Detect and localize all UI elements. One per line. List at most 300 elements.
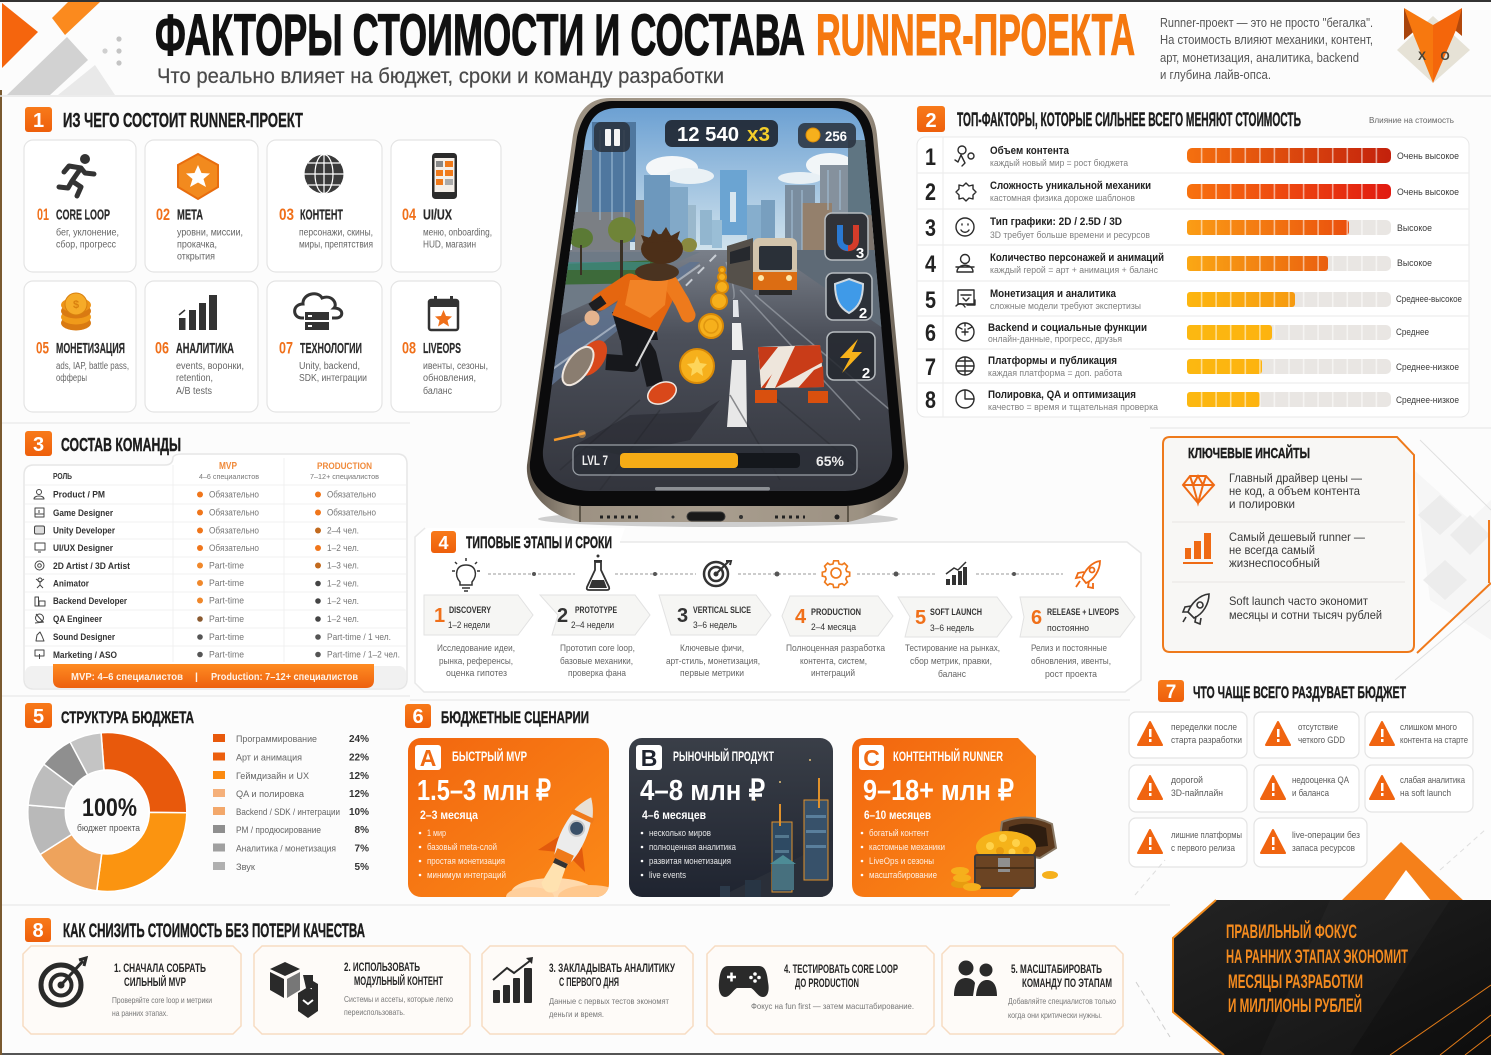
- card: technology: 07: [279, 338, 293, 358]
- hud: coins: 256: [825, 128, 847, 144]
- card: ui ux: 04: [402, 205, 416, 224]
- factor 4: каждый герой = арт + анимация + баланс: [990, 265, 1159, 275]
- card: content: КОНТЕНТ: [300, 208, 343, 224]
- tip 1: [23, 946, 241, 1034]
- card: live ops without reserve: live-операции без: [1292, 830, 1360, 840]
- factor 1: Объем контента: [990, 145, 1070, 157]
- power-up: shield: [826, 273, 872, 322]
- icon: rocket orange: [1076, 561, 1100, 588]
- card: liveops: 08: [402, 338, 416, 358]
- card: technology: ТЕХНОЛОГИИ: [300, 341, 362, 357]
- factor 8: качество = время и тщательная проверка: [988, 402, 1158, 412]
- card: monetization: офферы: [56, 372, 87, 384]
- factor 4: [925, 251, 1432, 278]
- row: product: [34, 490, 376, 500]
- icon: globe: [304, 154, 344, 194]
- factor 7: каждая платформа = доп. работа: [988, 368, 1122, 378]
- badge 5: [25, 703, 52, 728]
- factor 3: [925, 215, 1432, 242]
- scenario A: простая монетизация: [427, 856, 505, 867]
- card: meta: уровни, миссии,: [177, 228, 243, 238]
- stage: discovery: Исследование идеи,: [437, 643, 515, 653]
- stage: soft launch: [898, 597, 1012, 679]
- donut center label: [77, 794, 141, 834]
- card: content: 03: [279, 205, 294, 224]
- card: content: [267, 140, 382, 272]
- card: rework: переделки после: [1171, 722, 1237, 732]
- stage: vertical slice: [659, 595, 771, 678]
- intro text: и глубина лайв-опса.: [1160, 68, 1271, 82]
- card: rework: старта разработки: [1171, 735, 1242, 745]
- factor 5: Среднее-высокое: [1396, 294, 1462, 305]
- budget legend: 24%: [349, 734, 369, 745]
- stage: production: 4: [795, 606, 807, 628]
- scenario C: богатый контент: [869, 828, 929, 839]
- row: animator: [36, 578, 359, 588]
- stage: vertical slice: первые метрики: [680, 668, 744, 678]
- factor 6: [925, 320, 1429, 347]
- factor 1: 1: [925, 144, 936, 171]
- card: analytics: events, воронки,: [176, 361, 244, 372]
- budget legend: 7%: [355, 844, 369, 854]
- stage: vertical slice: Ключевые фичи,: [680, 643, 744, 653]
- factor 3: 3: [925, 215, 936, 242]
- card: technology: [267, 281, 382, 412]
- factor table: [917, 137, 1469, 417]
- card: ui ux: меню, onboarding,: [423, 228, 492, 238]
- factor 7: Среднее-низкое: [1396, 362, 1459, 373]
- row: unity developer: [34, 526, 359, 536]
- row: unity developer: 2–4 чел.: [327, 526, 359, 536]
- stage: release and liveops: обновления, ивенты,: [1031, 656, 1111, 666]
- stage: discovery: 1–2 недели: [448, 620, 490, 630]
- tip 2: Системы и ассеты, которые легко: [344, 994, 453, 1004]
- stage: vertical slice: VERTICAL SLICE: [693, 605, 751, 616]
- panel: 1 what a runner project consists of: [24, 107, 501, 412]
- budget legend: Аналитика / монетизация: [236, 844, 336, 854]
- tip 5: когда они критически нужны.: [1008, 1010, 1102, 1020]
- stage: vertical slice: 3–6 недель: [693, 620, 737, 630]
- callout banner: МЕСЯЦЫ РАЗРАБОТКИ: [1228, 972, 1363, 993]
- heading 6: БЮДЖЕТНЫЕ СЦЕНАРИИ: [441, 709, 589, 727]
- icon: target: [704, 561, 731, 586]
- icon: diamond: [1183, 476, 1214, 503]
- card: expensive 3d: [1129, 765, 1247, 812]
- scenario A: базовый meta-слой: [427, 842, 497, 853]
- row: qa: [35, 614, 359, 624]
- factor 1: [925, 144, 1459, 171]
- stage: soft launch: SOFT LAUNCH: [930, 607, 982, 618]
- card: meta: [145, 140, 258, 272]
- stage: prototype: проверка фана: [568, 668, 627, 678]
- callout banner: ПРАВИЛЬНЫЙ ФОКУС: [1226, 921, 1357, 943]
- coins on track: [680, 267, 728, 383]
- factor 7: [925, 354, 1459, 381]
- row: ui ux designer: UI/UX Designer: [53, 543, 113, 553]
- scenario B: 4–8 млн ₽: [640, 775, 765, 807]
- heading 5: СТРУКТУРА БЮДЖЕТА: [61, 709, 194, 727]
- badge 7: 7: [1166, 682, 1176, 703]
- icon: hexagon star: [178, 154, 218, 199]
- team summary bar: |: [195, 671, 198, 683]
- stage: vertical slice: арт-стиль, монетизация,: [666, 656, 760, 666]
- hud: score: x3: [747, 124, 770, 146]
- stage: discovery: DISCOVERY: [449, 605, 491, 616]
- icon: coin stack: $: [73, 299, 79, 311]
- stage: discovery: оценка гипотез: [446, 668, 507, 678]
- factor 5: 5: [925, 287, 936, 314]
- row: marketing: Part-time: [209, 650, 244, 660]
- insight: content drives cost: Главный драйвер цены —: [1229, 472, 1362, 485]
- scenario C: [852, 738, 1058, 897]
- row: unity developer: Unity Developer: [53, 526, 115, 536]
- scenario C: масштабирование: [869, 870, 937, 881]
- team summary bar: MVP: 4–6 специалистов: [71, 671, 183, 683]
- card: meta: МЕТА: [177, 208, 203, 224]
- card: extra platforms: [1129, 818, 1247, 867]
- factor 3: 3D требует больше времени и ресурсов: [990, 230, 1150, 240]
- hud: level progress: 65%: [816, 453, 845, 469]
- row: sound: Part-time / 1 чел.: [327, 632, 391, 642]
- barrier: [755, 345, 828, 403]
- card: technology: Unity, backend,: [299, 361, 360, 372]
- row: unity developer: Обязательно: [209, 526, 259, 536]
- insight: cheapest not viable: [1183, 531, 1365, 570]
- heading 1: ИЗ ЧЕГО СОСТОИТ RUNNER-ПРОЕКТ: [63, 110, 303, 132]
- badge 6: [405, 704, 431, 728]
- hud: level progress: [573, 445, 857, 475]
- factor 2: [925, 179, 1459, 206]
- callout banner: И МИЛЛИОНЫ РУБЛЕЙ: [1228, 995, 1362, 1017]
- donut center label: бюджет проекта: [77, 823, 141, 834]
- card: monetization: 05: [36, 338, 49, 358]
- tip 3: 3. ЗАКЛАДЫВАТЬ АНАЛИТИКУ: [549, 963, 676, 975]
- game screen: [535, 105, 900, 495]
- card: weak analytics: слабая аналитика: [1400, 775, 1466, 785]
- scenario B: полноценная аналитика: [649, 842, 737, 853]
- card: core loop: [24, 140, 136, 272]
- icon: bulb: [452, 558, 480, 591]
- scenario C: КОНТЕНТНЫЙ RUNNER: [893, 747, 1003, 764]
- factor 6: 6: [925, 320, 936, 347]
- card: analytics: retention,: [176, 373, 213, 384]
- icon: fox logo: O: [1440, 49, 1450, 63]
- card: extra platforms: лишние платформы: [1171, 830, 1242, 840]
- row: ui ux designer: [35, 543, 359, 553]
- icon: fox logo: X: [1418, 49, 1426, 63]
- row: product: Product / PM: [53, 490, 105, 500]
- power-up: lightning: [827, 332, 875, 382]
- stage: soft launch: Тестирование на рынках,: [905, 643, 1000, 653]
- budget legend: 12%: [349, 789, 369, 800]
- badge 3: [25, 431, 52, 456]
- stage: production: 2–4 месяца: [811, 622, 856, 632]
- budget legend: Программирование: [236, 734, 317, 745]
- decor: orange triangle: [1135, 830, 1485, 1037]
- card: no gdd: [1254, 712, 1359, 758]
- stage: discovery: [424, 595, 533, 678]
- card: core loop: сбор, прогресс: [56, 238, 116, 250]
- budget legend: 12%: [349, 771, 369, 782]
- icon: cloud server: [295, 294, 342, 330]
- panel: 7 budget inflators: [1129, 680, 1473, 867]
- card: core loop: 01: [37, 205, 49, 224]
- factor 8: [925, 387, 1459, 414]
- tip 5: КОМАНДУ ПО ЭТАПАМ: [1022, 978, 1112, 990]
- factor 2: кастомная физика дороже шаблонов: [990, 193, 1135, 203]
- hud: score: 12 540: [677, 124, 739, 146]
- tip 4: ДО PRODUCTION: [795, 978, 859, 990]
- scenario B: [629, 738, 833, 897]
- panel: 5 budget structure: [25, 703, 369, 891]
- stage: release and liveops: Релиз и постоянные: [1031, 643, 1107, 653]
- team table: 4–6 специалистов: [199, 472, 259, 481]
- stage: soft launch: сбор метрик, правки,: [910, 656, 992, 666]
- tip 4: Фокус на fun first — затем масштабирование.: [751, 1001, 914, 1011]
- card: analytics: A/B tests: [176, 386, 212, 397]
- tip 4: [707, 946, 934, 1034]
- card: technology: SDK, интеграции: [299, 373, 367, 384]
- intro text: Runner-проект — это не просто "бегалка".: [1160, 16, 1373, 30]
- badge 7: [1158, 680, 1184, 703]
- callout banner: [1173, 900, 1491, 1055]
- tip 3: Данные с первых тестов экономят: [549, 996, 669, 1006]
- hud: score: [665, 120, 778, 147]
- row: animator: Animator: [53, 578, 89, 588]
- tip 3: С ПЕРВОГО ДНЯ: [559, 977, 619, 989]
- tip 1: СИЛЬНЫЙ MVP: [124, 976, 186, 989]
- factor 1: Очень высокое: [1397, 151, 1459, 162]
- icon: gamepad: [719, 966, 769, 997]
- panel: 6 budget scenarios: [405, 704, 1058, 909]
- insight: content drives cost: [1183, 472, 1362, 511]
- icon: gear: [822, 561, 850, 587]
- budget legend: QA и полировка: [236, 789, 305, 800]
- stage: release and liveops: постоянно: [1047, 623, 1089, 633]
- scenario C: C: [863, 745, 880, 771]
- card: analytics: [145, 281, 258, 412]
- row: ui ux designer: 1–2 чел.: [327, 543, 359, 553]
- row: game designer: Обязательно: [209, 508, 259, 518]
- factor 4: Количество персонажей и анимаций: [990, 252, 1164, 264]
- icon: runner: [59, 154, 94, 196]
- runner character: [556, 227, 688, 408]
- card: weak analytics: [1365, 765, 1473, 812]
- budget legend: 8%: [355, 825, 369, 836]
- title: ФАКТОРЫ СТОИМОСТИ И СОСТАВА: [155, 3, 805, 68]
- factor 8: Среднее-низкое: [1396, 395, 1459, 406]
- scenario A: 1.5–3 млн ₽: [417, 775, 551, 807]
- team table: [24, 454, 407, 689]
- row: qa: Part-time: [209, 614, 244, 624]
- card: meta: прокачка,: [177, 240, 217, 250]
- row: animator: 1–2 чел.: [327, 578, 359, 588]
- header decoration: [2, 2, 122, 95]
- tip 5: 5. МАСШТАБИРОВАТЬ: [1011, 964, 1102, 976]
- tip 5: Добавляйте специалистов только: [1008, 996, 1116, 1006]
- panel: 2 top cost factors: [917, 106, 1469, 417]
- factor 3: Тип графики: 2D / 2.5D / 3D: [990, 216, 1122, 228]
- tip 5: [942, 946, 1123, 1034]
- title: RUNNER-ПРОЕКТА: [816, 3, 1135, 68]
- card: live ops without reserve: запаса ресурсов: [1292, 843, 1355, 853]
- icon: rocket outline: [1183, 594, 1209, 624]
- icon: phone: [432, 153, 457, 199]
- badge 4: 4: [438, 533, 449, 553]
- panel: 8 how to reduce cost: [23, 918, 1123, 1034]
- factor 5: сложные модели требуют экспертизы: [990, 301, 1141, 311]
- heading 4: ТИПОВЫЕ ЭТАПЫ И СРОКИ: [466, 533, 612, 552]
- factor 4: 4: [925, 251, 937, 278]
- tip 3: [482, 946, 693, 1034]
- budget legend: Геймдизайн и UX: [236, 771, 310, 782]
- scenario C: кастомные механики: [869, 842, 945, 853]
- stage: release and liveops: 6: [1031, 607, 1042, 629]
- scenario B: live events: [649, 870, 686, 881]
- scenario B: развитая монетизация: [649, 856, 731, 867]
- card: qa underestimated: [1254, 765, 1359, 812]
- factor 6: онлайн-данные, прогресс, друзья: [988, 334, 1122, 344]
- row: backend: 1–2 чел.: [327, 596, 359, 606]
- card: liveops: [391, 281, 501, 412]
- card: extra platforms: с первого релиза: [1171, 843, 1236, 853]
- donut chart: [28, 732, 187, 891]
- card: expensive 3d: 3D-пайплайн: [1171, 788, 1223, 798]
- insight: cheapest not viable: Самый дешевый runner —: [1229, 531, 1365, 544]
- badge 2: 2: [925, 110, 937, 132]
- panel: key insights: [1163, 437, 1414, 652]
- row: artist: Part-time: [209, 560, 244, 570]
- card: monetization: [24, 281, 136, 412]
- stage: prototype: Прототип core loop,: [560, 643, 635, 653]
- card: meta: 02: [156, 205, 170, 224]
- row: game designer: Обязательно: [327, 508, 376, 518]
- tip 1: Проверяйте core loop и метрики: [112, 995, 212, 1005]
- icon: calendar star: [429, 296, 458, 330]
- tip 1: на ранних этапах.: [112, 1008, 168, 1018]
- insight: content drives cost: не код, а объем контента: [1229, 485, 1361, 498]
- budget legend: Арт и анимация: [236, 752, 302, 764]
- stage: soft launch: 5: [915, 607, 926, 629]
- insight: cheapest not viable: жизнеспособный: [1229, 557, 1320, 570]
- power-up: magnet: 3: [856, 245, 864, 262]
- insight: cheapest not viable: не всегда самый: [1229, 544, 1315, 557]
- tip 1: 1. СНАЧАЛА СОБРАТЬ: [114, 963, 206, 975]
- team table: PRODUCTION: [317, 461, 372, 472]
- factor 2: Сложность уникальной механики: [990, 180, 1151, 192]
- row: qa: 1–2 чел.: [327, 614, 359, 624]
- row: animator: Part-time: [209, 578, 244, 588]
- row: product: Обязательно: [209, 490, 259, 500]
- card: live ops without reserve: [1254, 818, 1367, 867]
- card: analytics: АНАЛИТИКА: [176, 341, 234, 357]
- panel: 3 team composition: [24, 431, 407, 689]
- hud: pause: [594, 122, 630, 152]
- icon: bars: [179, 295, 217, 330]
- stage: release and liveops: [1020, 597, 1135, 679]
- stage: prototype: [540, 595, 650, 678]
- scenario C: LiveOps и сезоны: [869, 856, 934, 867]
- insights heading: КЛЮЧЕВЫЕ ИНСАЙТЫ: [1188, 444, 1310, 462]
- donut center label: 100%: [82, 794, 137, 822]
- power-up: lightning: 2: [862, 365, 870, 382]
- icon: orange bars: [1183, 533, 1213, 564]
- stage: release and liveops: рост проекта: [1045, 669, 1098, 679]
- stage: production: Полноценная разработка: [786, 643, 886, 653]
- team summary bar: Production: 7–12+ специалистов: [211, 671, 358, 683]
- tip 2: переиспользовать.: [344, 1007, 405, 1017]
- card: liveops: обновления,: [423, 372, 476, 384]
- team summary bar: [53, 664, 374, 688]
- row: backend: Part-time: [209, 596, 244, 606]
- badge 4: [431, 531, 456, 553]
- icon: fox logo: [1397, 8, 1470, 83]
- badge 8: 8: [32, 920, 44, 942]
- card: liveops: LIVEOPS: [423, 341, 461, 357]
- factor 8: Полировка, QA и оптимизация: [988, 389, 1136, 401]
- budget legend: Backend / SDK / интеграции: [236, 807, 340, 818]
- card: too much content: контента на старте: [1400, 735, 1468, 745]
- insight: soft launch saves: Soft launch часто экономит: [1229, 595, 1369, 608]
- power-up: magnet: [825, 213, 868, 262]
- intro text: арт, монетизация, аналитика, backend: [1160, 51, 1359, 65]
- stage: production: PRODUCTION: [811, 607, 861, 618]
- row: marketing: [35, 650, 400, 660]
- factor 8: 8: [925, 387, 936, 414]
- icon: growth chart: [946, 562, 967, 585]
- factor 1: каждый новый мир = рост бюджета: [990, 158, 1128, 168]
- card: monetization: ads, IAP, battle pass,: [56, 361, 129, 372]
- badge 3: 3: [33, 434, 44, 456]
- row: qa: QA Engineer: [53, 614, 102, 624]
- card: meta: открытия: [177, 252, 215, 262]
- scenario B: B: [641, 745, 657, 771]
- stage: production: контента, систем,: [800, 656, 867, 666]
- card: qa underestimated: и баланса: [1292, 788, 1330, 798]
- scenario C: 9–18+ млн ₽: [863, 775, 1014, 807]
- timeline connectors: [488, 572, 1063, 576]
- phone bottom edge: [580, 506, 848, 522]
- row: ui ux designer: Обязательно: [209, 543, 259, 553]
- badge 5: 5: [33, 706, 44, 728]
- stage: discovery: 1: [434, 605, 445, 627]
- factor 5: Монетизация и аналитика: [990, 288, 1117, 300]
- heading 8: КАК СНИЗИТЬ СТОИМОСТЬ БЕЗ ПОТЕРИ КАЧЕСТВА: [63, 921, 365, 942]
- badge 1: 1: [33, 110, 44, 132]
- illustration: rocket: [506, 798, 608, 897]
- phone with runner game: [527, 98, 908, 527]
- intro text: На стоимость влияют механики, контент,: [1160, 33, 1373, 47]
- card: too much content: слишком много: [1400, 722, 1457, 732]
- panel: 4 stages and timing: [415, 528, 1141, 692]
- insight: content drives cost: и полировки: [1229, 498, 1295, 511]
- icon: team: [954, 960, 997, 996]
- budget legend: 10%: [349, 807, 369, 818]
- stage: vertical slice: 3: [677, 605, 688, 627]
- tip 2: [254, 946, 470, 1034]
- budget legend: 5%: [355, 862, 369, 873]
- hud: coins: [798, 123, 856, 148]
- factor 7: 7: [925, 354, 936, 381]
- row: artist: 2D Artist / 3D Artist: [53, 561, 130, 571]
- card: no gdd: четкого GDD: [1298, 735, 1345, 745]
- factor 3: Высокое: [1397, 223, 1432, 234]
- intro text: [1160, 16, 1373, 82]
- illustration: city: [720, 759, 833, 897]
- row: marketing: Marketing / ASO: [53, 650, 117, 660]
- budget legend: 22%: [349, 752, 369, 764]
- card: content: миры, препятствия: [299, 240, 373, 250]
